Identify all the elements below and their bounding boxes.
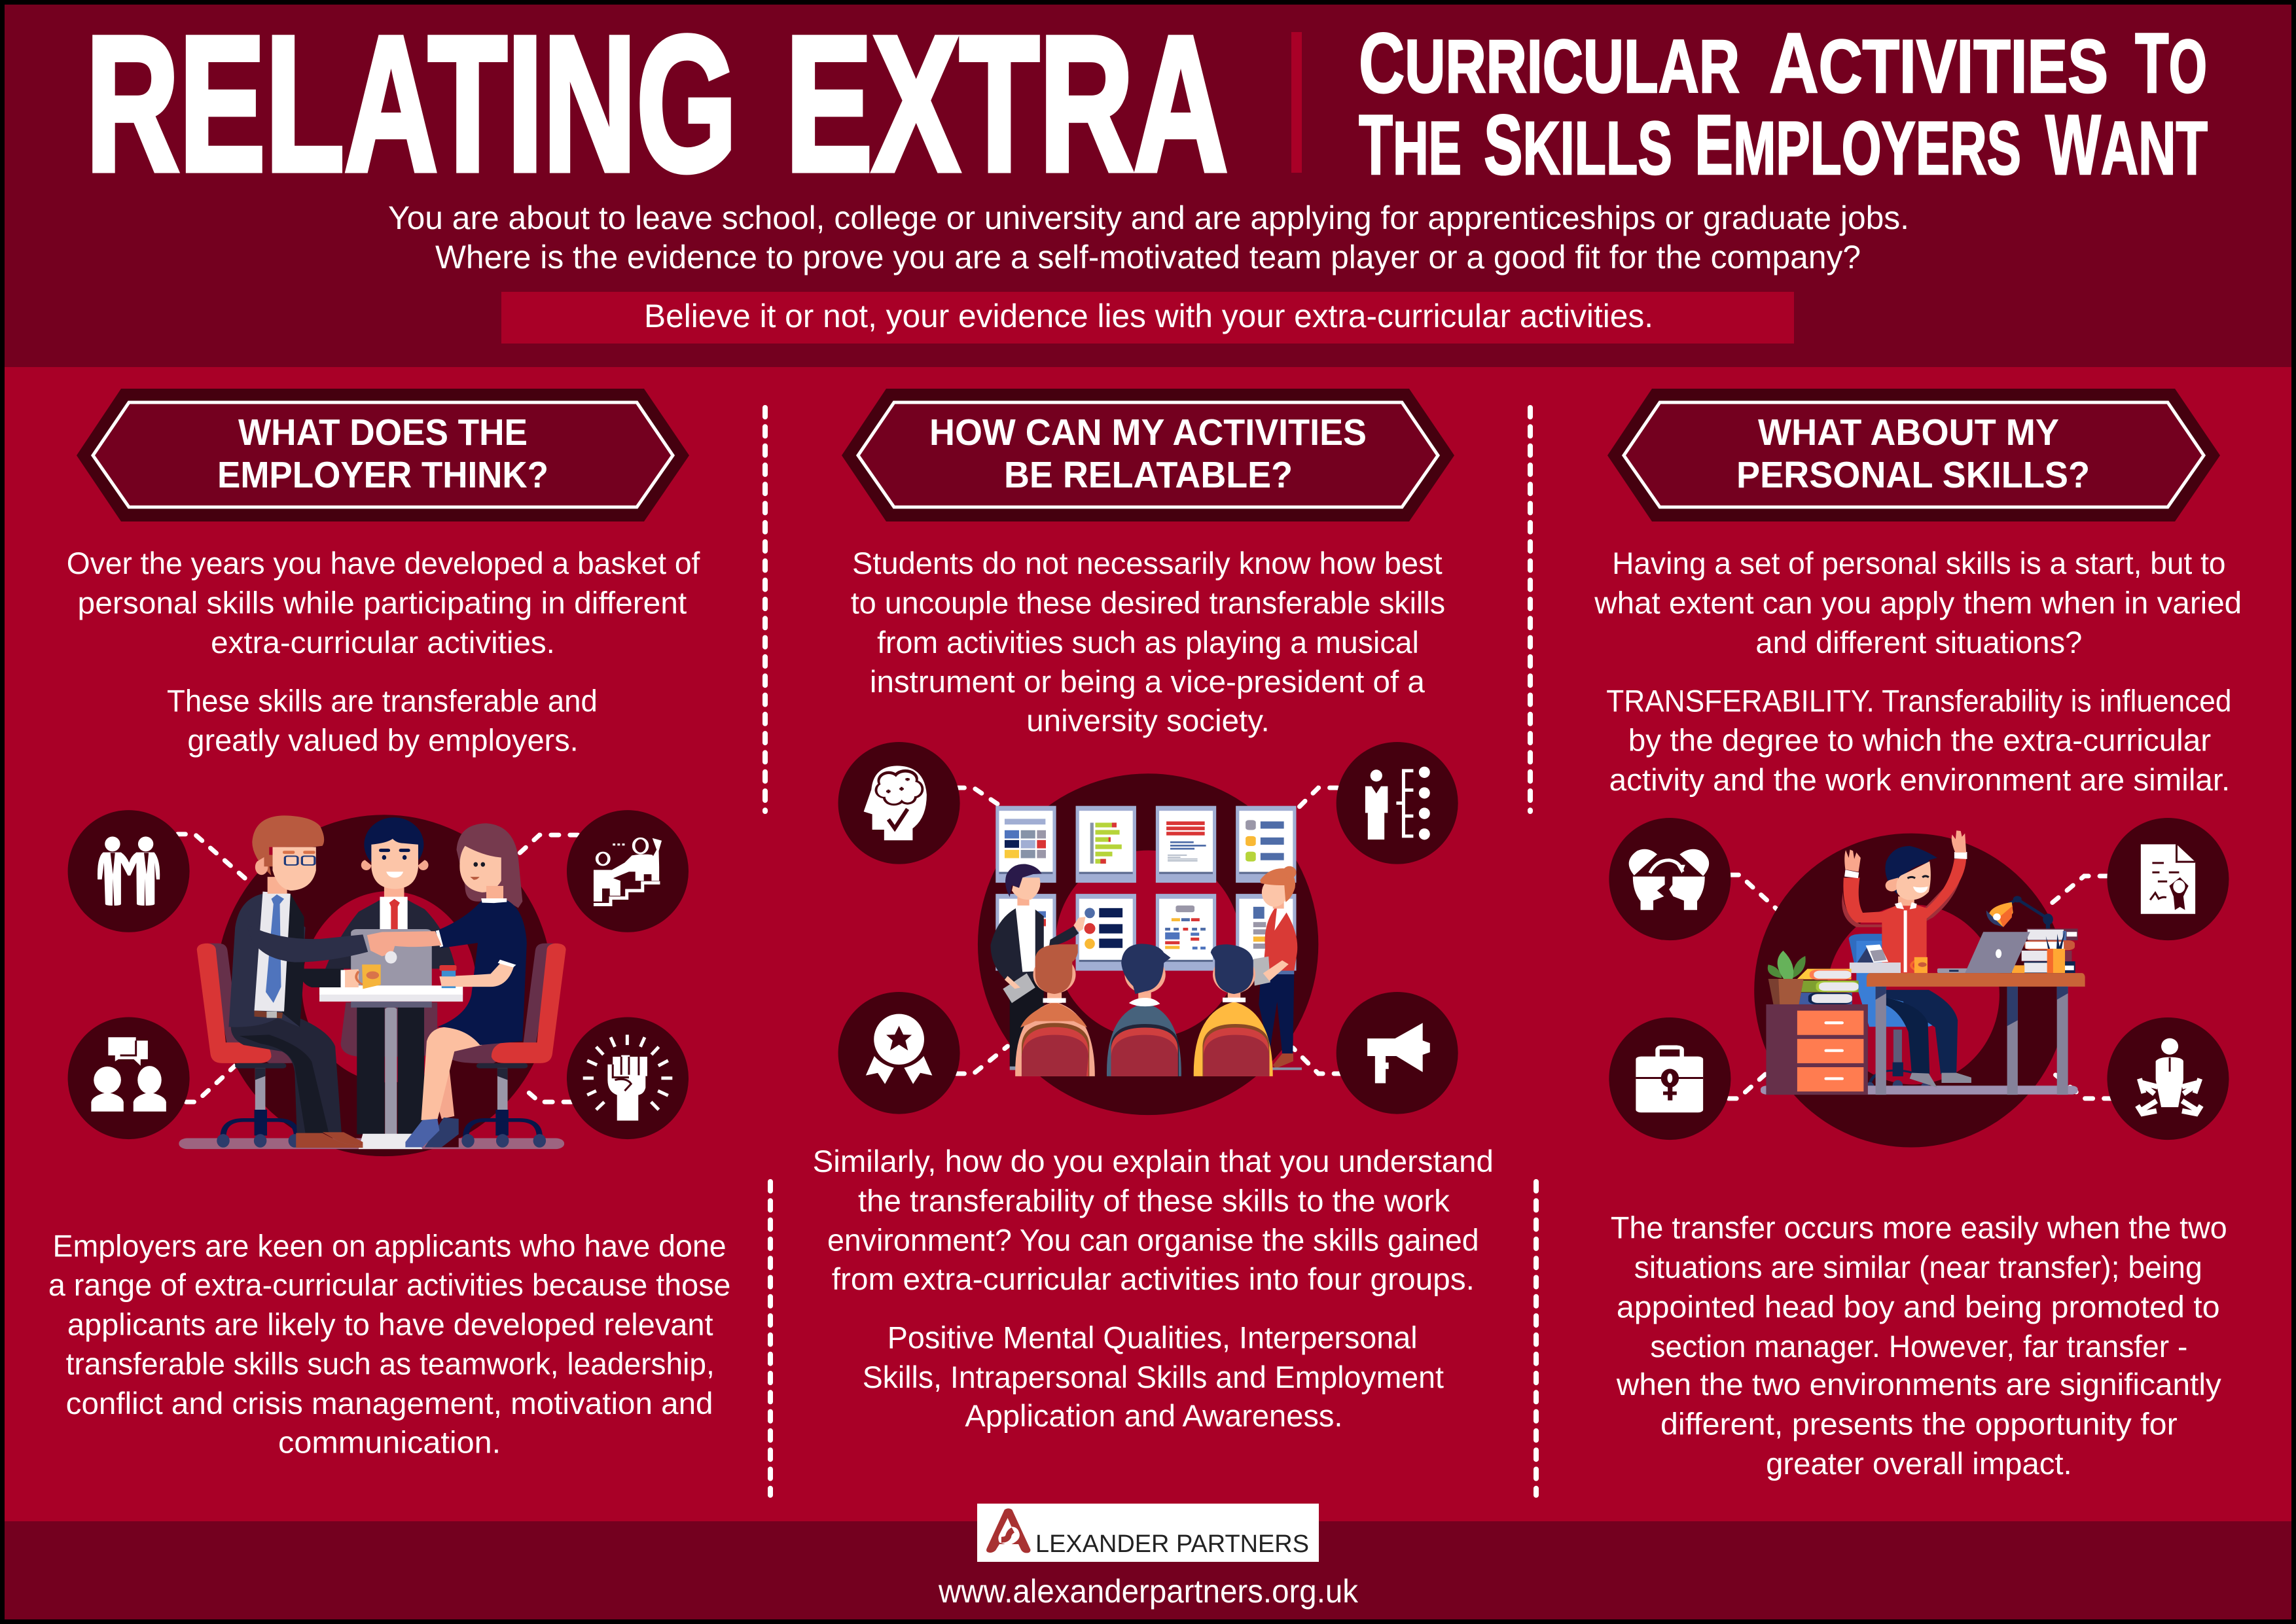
heading: what about my personal skills [1607, 389, 2220, 521]
icon: first aid briefcase [1609, 1017, 1731, 1140]
column 2 text: transferability groups: the transferability of these skills to the work [858, 1183, 1450, 1218]
icon: interpersonal network [1336, 742, 1458, 864]
footer band [5, 1504, 2291, 1619]
column 3 text: near and far transfer: situations are similar (near transfer); being [1634, 1250, 2202, 1284]
board 5 [996, 894, 1056, 971]
backdrop ring [1754, 834, 2068, 1148]
column 2 text: transferability groups: Similarly, how do you explain that you understand [813, 1144, 1494, 1178]
website url: www.alexanderpartners.org.uk [938, 1573, 1359, 1610]
column 1 text: employers keen [48, 1229, 730, 1459]
left man [228, 815, 381, 1148]
column 3 text: near and far transfer: greater overall impact. [1766, 1446, 2072, 1481]
illustration 3: happy worker at desk [1609, 818, 2229, 1148]
column 1 text: employers keen: a range of extra-curricular activities because those [48, 1267, 730, 1302]
table [319, 985, 463, 1149]
lamp [1986, 896, 2053, 929]
heading: what does the employer think: EMPLOYER THINK? [217, 454, 548, 496]
title: relating extra: RELATING [86, 0, 737, 211]
column 1 text: basket of skills: These skills are transferable and [167, 683, 598, 718]
icon: stairs mentoring [567, 810, 689, 932]
column 3 text: near and far transfer: different, presents the opportunity for [1660, 1406, 2178, 1441]
icon: positive mind [838, 742, 960, 864]
filing cabinet [1766, 1004, 1868, 1095]
column 2 text: students: instrument or being a vice-president of a [870, 664, 1426, 699]
column 3 text: near and far transfer: when the two environments are significantly [1616, 1367, 2221, 1402]
subtitle: THE [1359, 97, 1462, 192]
icon: certificate [2107, 818, 2229, 940]
board 3 [1156, 806, 1216, 883]
column 1 text: basket of skills: Over the years you have developed a basket of [67, 546, 700, 580]
subtitle: ACTIVITIES [1769, 15, 2108, 111]
main red panel [5, 366, 2291, 1522]
audience member 1 [1015, 944, 1095, 1076]
column 2 text: students: to uncouple these desired transferable skills [851, 585, 1445, 620]
icon: megaphone [1336, 992, 1458, 1114]
laptop [1937, 932, 2030, 973]
right office chair [451, 944, 566, 1148]
column 2 text: transferability groups: environment? You can organise the skills gained [827, 1223, 1479, 1258]
icon: man with arrows [2107, 1017, 2229, 1140]
column 2 text: transferability groups: Positive Mental Qualities, Interpersonal [888, 1320, 1418, 1354]
heading: what about my personal skills: PERSONAL SKILLS? [1736, 454, 2090, 496]
column 3 text: near and far transfer: The transfer occurs more easily when the two [1611, 1210, 2227, 1245]
books and plant [1768, 951, 1859, 1004]
heading: how can my activities be relatable: HOW CAN MY ACTIVITIES [929, 412, 1367, 453]
backdrop ring [216, 815, 552, 1156]
subtitle [1359, 15, 2208, 192]
centre man [325, 817, 456, 1135]
board 7 [1156, 894, 1216, 971]
column 1 text: employers keen: transferable skills such as teamwork, leadership, [66, 1347, 715, 1381]
icon: team handshake [68, 810, 190, 932]
logo: LEXANDER PARTNERS [1035, 1530, 1309, 1558]
book stacks on desk [2012, 928, 2078, 973]
audience member 2 [1107, 944, 1181, 1076]
column 1 text: employers keen: applicants are likely to have developed relevant [67, 1307, 713, 1341]
column 1 text: basket of skills: extra-curricular activities. [211, 625, 555, 660]
heading: what does the employer think: WHAT DOES THE [238, 412, 528, 453]
title: relating extra: EXTRA [785, 0, 1228, 211]
board 1 [996, 806, 1056, 883]
worker chair [1849, 934, 1937, 1091]
header band [5, 0, 2291, 367]
column 1 text: basket of skills: personal skills while participating in different [78, 585, 687, 620]
title divider [1291, 32, 1302, 173]
information boards [996, 806, 1297, 971]
heading: how can my activities be relatable [842, 389, 1454, 521]
column 2 text: students: Students do not necessarily know how best [852, 546, 1443, 580]
subtitle: TO [2135, 15, 2207, 111]
laptop [351, 929, 432, 989]
mug and calculator [1850, 945, 1928, 973]
icon: conversation [68, 1017, 190, 1139]
board 8 [1236, 894, 1297, 971]
intro text: You are about to leave school, college or university and are applying for apprenticeships or graduate jobs. [388, 200, 1909, 236]
board 4 [1236, 806, 1297, 883]
subtitle: SKILLS [1484, 97, 1672, 192]
column 3 text: near and far transfer [1611, 1210, 2227, 1481]
subtitle: WANT [2045, 97, 2208, 192]
heading: how can my activities be relatable: BE RELATABLE? [1004, 454, 1293, 496]
heading: what about my personal skills: WHAT ABOUT MY [1758, 412, 2059, 453]
column 3 text: near and far transfer: section manager. However, far transfer - [1650, 1329, 2187, 1364]
board 6 [1076, 894, 1136, 971]
left office chair [197, 944, 312, 1148]
column 2 text: transferability groups: from extra-curricular activities into four groups. [832, 1262, 1475, 1296]
worker [1842, 830, 1967, 974]
woman [405, 823, 527, 1147]
floor bar [1761, 1086, 2078, 1095]
worker legs and shoes [1882, 990, 1971, 1087]
column 3 text: having personal skills: by the degree to which the extra-curricular [1628, 723, 2211, 758]
intro text [388, 200, 1909, 275]
column 3 text: having personal skills: TRANSFERABILITY. Transferability is influenced [1606, 683, 2231, 718]
highlight banner: Believe it or not, your evidence lies with your extra-curricular activities. [644, 298, 1653, 334]
column 3 text: having personal skills: and different situations? [1755, 625, 2082, 660]
column 2 text: students [851, 546, 1445, 737]
column 1 text: employers keen: Employers are keen on applicants who have done [53, 1229, 726, 1263]
logo [977, 1504, 1319, 1562]
column 2 text: transferability groups [813, 1144, 1494, 1433]
highlight banner [501, 292, 1794, 344]
column 3 text: having personal skills: Having a set of personal skills is a start, but to [1612, 546, 2226, 580]
floor [179, 1138, 564, 1149]
icon: award rosette [838, 992, 960, 1114]
column 1 text: employers keen: conflict and crisis management, motivation and [66, 1386, 713, 1421]
board 2 [1076, 806, 1136, 883]
audience member 3 [1194, 944, 1273, 1076]
presenter man [990, 864, 1086, 1070]
column 3 text: having personal skills [1594, 546, 2242, 797]
column 3 text: having personal skills: what extent can you apply them when in varied [1594, 585, 2242, 620]
desk [1867, 973, 2085, 1095]
presenter woman [1253, 866, 1302, 1070]
intro text: Where is the evidence to prove you are a self-motivated team player or a good fit for the company? [435, 239, 1861, 275]
column 1 text: basket of skills [67, 546, 700, 758]
column 2 text: students: university society. [1026, 703, 1270, 737]
illustration 2: presentation [838, 742, 1458, 1115]
column 3 text: having personal skills: activity and the work environment are similar. [1609, 762, 2230, 797]
column 2 text: students: from activities such as playing a musical [877, 625, 1419, 660]
heading: what does the employer think [77, 389, 689, 521]
small desk items [385, 951, 397, 964]
subtitle: EMPLOYERS [1695, 97, 2021, 192]
logo mark [986, 1508, 1030, 1553]
backdrop ring [978, 773, 1318, 1115]
column 2 text: transferability groups: Skills, Intrapersonal Skills and Employment [863, 1360, 1444, 1394]
handshake [367, 931, 442, 957]
subtitle: CURRICULAR [1359, 15, 1740, 111]
column 1 text: basket of skills: greatly valued by employers. [187, 723, 579, 758]
icon: raised fist [567, 1017, 689, 1139]
icon: transfer between heads [1609, 818, 1731, 940]
column 1 text: employers keen: communication. [278, 1424, 501, 1459]
illustration 1: business meeting [68, 810, 689, 1156]
column 3 text: near and far transfer: appointed head boy and being promoted to [1617, 1289, 2220, 1324]
column 2 text: transferability groups: Application and Awareness. [965, 1398, 1343, 1433]
